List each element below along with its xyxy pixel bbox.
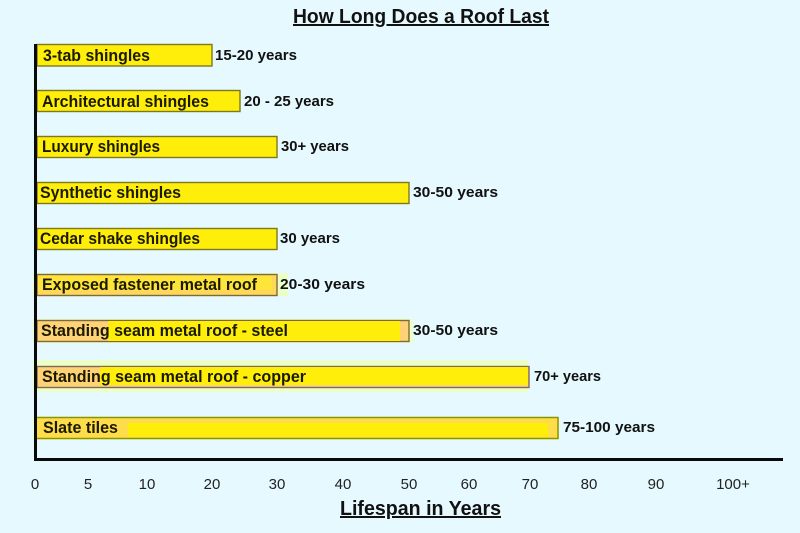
bar: slate tiles: 75-100 years	[563, 420, 655, 436]
bar: synthetic shingles: 30-50 years	[413, 185, 498, 201]
bar: luxury shingles: 30+ years	[281, 139, 349, 155]
x-axis tick labels: 0	[31, 476, 39, 493]
x-axis title: Lifespan in Years	[340, 498, 501, 520]
x-axis tick labels: 80	[581, 476, 597, 493]
x-axis tick labels: 50	[401, 476, 417, 493]
axes	[36, 44, 783, 460]
bar: 3-tab shingles: 15-20 years	[215, 48, 297, 64]
bar: exposed fastener metal roof: Exposed fastener metal roof	[42, 276, 257, 294]
bar: slate tiles: Slate tiles	[43, 419, 118, 437]
bar: cedar shake shingles: 30 years	[280, 231, 340, 247]
x-axis tick labels: 5	[84, 476, 92, 493]
x-axis tick labels: 20	[204, 476, 220, 493]
x-axis tick labels: 60	[461, 476, 477, 493]
bar: standing seam metal roof, steel: 30-50 years	[413, 323, 498, 339]
bar: exposed fastener metal roof: 20-30 years	[280, 277, 365, 293]
bar: standing seam metal roof, copper: 70+ years	[534, 369, 601, 385]
bar: standing seam metal roof, steel: Standing seam metal roof - steel	[41, 322, 288, 340]
x-axis tick labels: 70	[522, 476, 538, 493]
x-axis tick labels: 90	[648, 476, 664, 493]
bar: 3-tab shingles	[37, 44, 297, 66]
bar: exposed fastener metal roof	[33, 273, 365, 296]
x-axis tick labels: 30	[269, 476, 285, 493]
bar: slate tiles	[33, 417, 655, 440]
x-axis tick labels	[31, 476, 750, 493]
bar: standing seam metal roof, copper: Standing seam metal roof - copper	[42, 368, 307, 386]
title: How Long Does a Roof Last	[293, 6, 549, 28]
bar: architectural shingles: Architectural shingles	[42, 93, 209, 111]
x-axis tick labels: 40	[335, 476, 351, 493]
bar: architectural shingles: 20 - 25 years	[244, 94, 334, 110]
bar: standing seam metal roof, copper	[33, 360, 601, 392]
x-axis tick labels: 10	[139, 476, 155, 493]
bar: architectural shingles	[37, 90, 334, 112]
bar: standing seam metal roof, steel	[33, 319, 498, 343]
bar: luxury shingles	[37, 136, 349, 158]
bar: synthetic shingles: Synthetic shingles	[40, 184, 181, 202]
x-axis tick labels: 100+	[716, 476, 750, 493]
bar: luxury shingles: Luxury shingles	[42, 138, 160, 156]
bar: cedar shake shingles	[37, 228, 340, 250]
bar: cedar shake shingles: Cedar shake shingles	[40, 230, 200, 248]
bar: 3-tab shingles: 3-tab shingles	[43, 47, 150, 65]
bar: synthetic shingles	[37, 182, 498, 204]
